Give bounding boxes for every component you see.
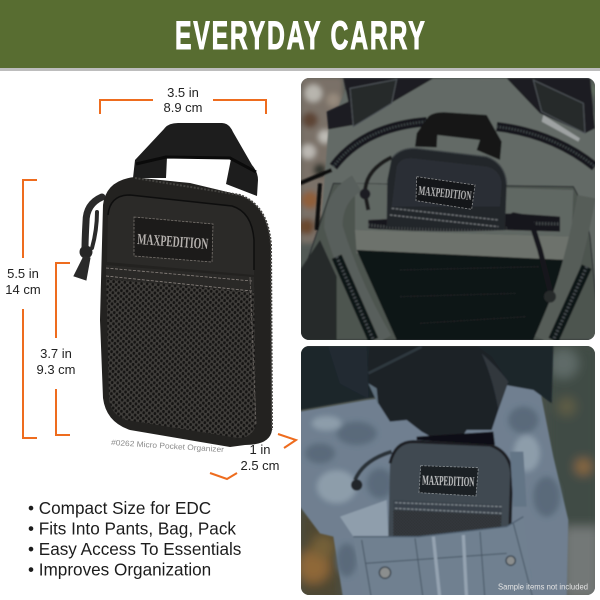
dimension: depth: 1 in [250, 442, 270, 457]
feature list: • Easy Access To Essentials [28, 539, 241, 559]
dimension: depth: 2.5 cm [240, 458, 280, 473]
mesh pocket [106, 271, 256, 438]
pouch body [100, 177, 272, 447]
shirt [300, 346, 553, 410]
main zipper [333, 122, 595, 167]
feature list [28, 498, 241, 580]
sample note: Sample items not included [498, 582, 588, 592]
lower panel [300, 183, 600, 340]
dimension: pocket height: 9.3 cm [36, 362, 76, 377]
small pouch [388, 442, 512, 537]
outdoor background [297, 343, 600, 600]
dimension: width [100, 85, 266, 115]
patch in photo [419, 466, 478, 496]
dimension: depth [210, 434, 296, 479]
pouch handle [133, 123, 258, 196]
zipper pull [513, 215, 552, 297]
dimension: full height: 14 cm [5, 282, 41, 297]
patch in photo: MAXPEDITION [418, 183, 473, 203]
patch in photo [416, 177, 475, 209]
title: EVERYDAY CARRY [175, 14, 425, 59]
brand patch: MAXPEDITION [137, 231, 209, 253]
dimension: full height: 5.5 in [7, 266, 39, 281]
feature list: • Fits Into Pants, Bag, Pack [28, 518, 236, 538]
feature list: • Compact Size for EDC [28, 498, 211, 518]
dimension: width: 8.9 cm [163, 100, 203, 115]
foliage background [299, 77, 599, 243]
photo: pouch in pants pocket [297, 343, 600, 600]
glove [377, 383, 499, 438]
dimension: full height [5, 180, 41, 438]
brand patch [134, 217, 213, 262]
photo: pouch in backpack [299, 77, 600, 343]
header banner [0, 0, 600, 71]
dimension: pocket height: 3.7 in [40, 346, 72, 361]
straps [333, 183, 383, 340]
feature list: • Improves Organization [28, 560, 211, 580]
small pouch handle [415, 112, 502, 160]
patch in photo: MAXPEDITION [422, 473, 475, 489]
pocket [510, 452, 527, 507]
dimension: pocket height [36, 263, 76, 435]
backpack body [300, 78, 600, 340]
small pouch [387, 148, 507, 230]
jeans [300, 383, 568, 600]
product caption: #0262 Micro Pocket Organizer [111, 438, 225, 454]
pull cord [74, 197, 102, 280]
product photo: pouch [74, 123, 272, 454]
dimension: width: 3.5 in [167, 85, 199, 100]
inner zipper [368, 213, 560, 232]
